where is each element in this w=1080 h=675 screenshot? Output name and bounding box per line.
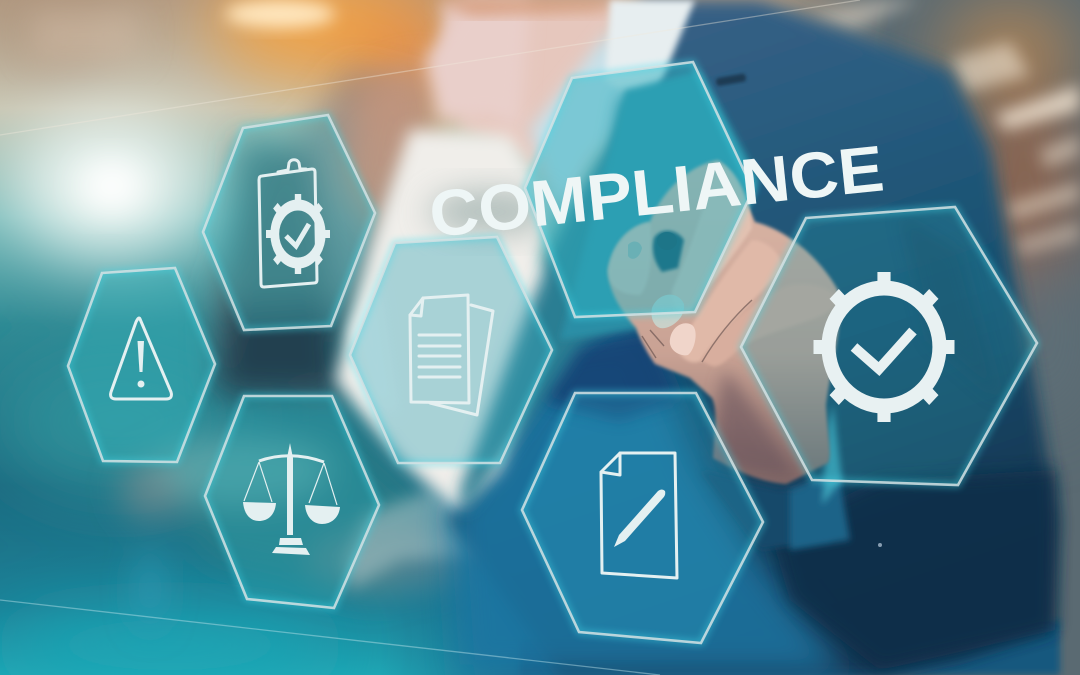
title: COMPLIANCE: COMPLIANCE [426, 131, 887, 251]
fingers [678, 240, 782, 362]
grey tone behind the first letters [428, 190, 552, 234]
icon: document with pencil [601, 453, 677, 578]
hexagon: pen and paper [522, 393, 763, 643]
shirt and collar [340, 60, 430, 240]
hexagon: warning [68, 268, 215, 462]
base of the torso along the bottom edge [520, 620, 1060, 675]
hexagon: clipboard [203, 115, 375, 330]
dark shoulder and left arm area [120, 70, 470, 630]
torso and suit [450, 0, 1058, 675]
icon: balance scales [243, 443, 340, 555]
hand holding a marker [608, 160, 840, 484]
stripes of light at the right [810, 0, 1080, 255]
marker tip [653, 231, 684, 272]
hexagon: central tie panel [525, 62, 753, 317]
icon: large gear with check mark [814, 272, 954, 422]
tie [460, 95, 700, 510]
hexagon: gear check [741, 207, 1037, 485]
hexagon: documents [350, 237, 552, 463]
fingernail and finger details [670, 323, 696, 355]
hexagon: scales of justice [205, 396, 379, 608]
icon: clipboard with gear check [259, 160, 330, 287]
icon: stacked document pages [410, 295, 493, 415]
thin light lines across the glass [0, 0, 860, 675]
icon: warning triangle [111, 318, 171, 399]
